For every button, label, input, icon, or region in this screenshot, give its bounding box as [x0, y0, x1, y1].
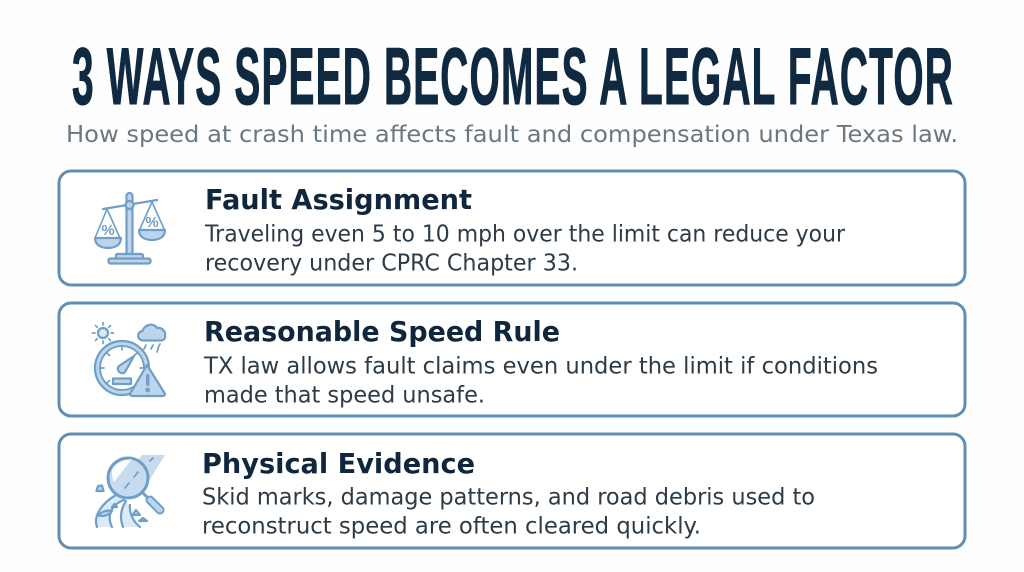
- text: physical evidence description: Skid marks, damage patterns, and road debris used to: [202, 482, 815, 510]
- text: fault assignment description: recovery under CPRC Chapter 33.: [205, 248, 578, 276]
- heading: fault assignment: Fault Assignment: [205, 183, 472, 216]
- icon: scales with percent signs: [95, 193, 165, 264]
- panel: physical evidence: [59, 434, 965, 548]
- text: reasonable speed description: made that speed unsafe.: [204, 380, 485, 408]
- text: reasonable speed description: TX law allows fault claims even under the limit if conditions: [203, 352, 878, 380]
- panel: fault assignment: [59, 171, 965, 285]
- text: physical evidence description: [202, 482, 815, 540]
- icon: speedometer with weather and warning: [92, 322, 165, 396]
- panel: reasonable speed rule: [59, 303, 965, 416]
- text: reasonable speed description: [203, 352, 878, 408]
- text: physical evidence description: reconstruct speed are often cleared quickly.: [202, 512, 701, 540]
- icon: scales with percent signs: %: [145, 214, 159, 231]
- text: fault assignment description: [204, 220, 845, 276]
- icon: magnifying glass over road with debris: [96, 455, 165, 527]
- heading: physical evidence: Physical Evidence: [202, 447, 475, 480]
- subtitle: How speed at crash time affects fault and compensation under Texas law.: [66, 120, 958, 148]
- text: fault assignment description: Traveling even 5 to 10 mph over the limit can reduce your: [204, 220, 845, 248]
- heading: reasonable speed rule: Reasonable Speed Rule: [204, 315, 560, 348]
- icon: scales with percent signs: %: [101, 222, 115, 239]
